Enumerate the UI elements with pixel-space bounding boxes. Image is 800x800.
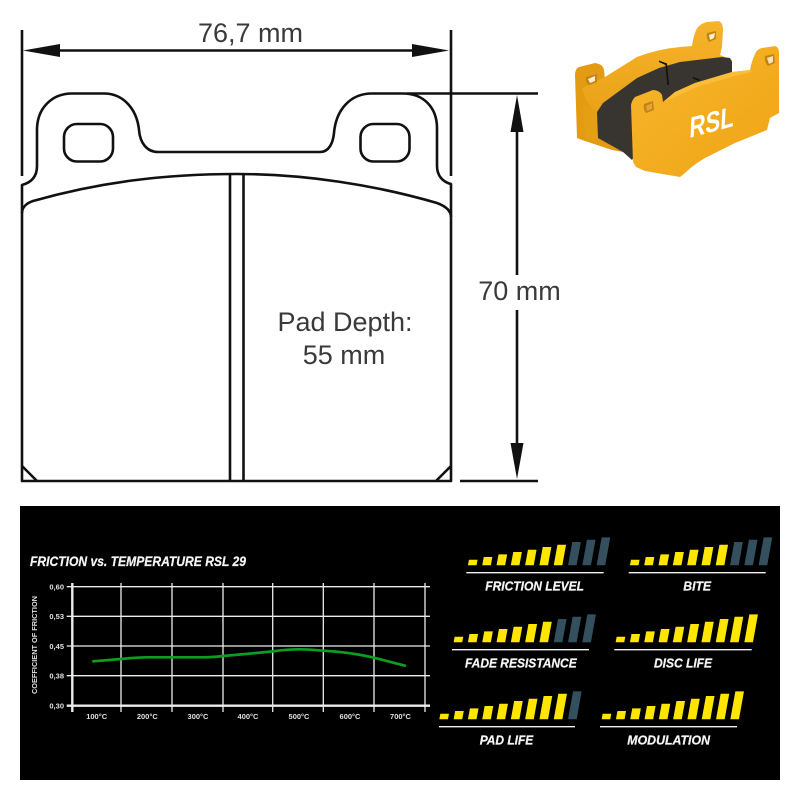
product photo: yellow RSL brake pad [575,21,779,177]
chart title: FRICTION vs. TEMPERATURE RSL 29 [30,554,246,569]
pad depth label: Pad Depth: [277,307,413,337]
line chart: friction vs temperature: 200°C [137,712,158,721]
height dimension: 70 mm: 70 mm [478,276,561,306]
logo: RSL: RSL [689,101,735,145]
technical drawing: brake pad outline [22,94,451,481]
line chart: friction vs temperature: 0,45 [49,642,64,651]
line chart: friction vs temperature: 300°C [188,712,209,721]
height dimension: 70 mm [407,94,561,481]
rating: bite: BITE [683,579,711,594]
line chart: friction vs temperature: 700°C [390,712,412,721]
line chart: friction vs temperature: 400°C [238,712,259,721]
rating: friction level: FRICTION LEVEL [485,579,584,594]
line chart: friction vs temperature: 0,38 [49,672,64,680]
rating: bite [629,538,772,594]
rating: modulation: MODULATION [627,732,711,747]
rating: disc life: DISC LIFE [654,656,712,671]
line chart: friction vs temperature: 500°C [289,712,310,721]
panel: performance data [20,506,780,780]
rating: friction level [466,538,610,594]
rating: pad life: PAD LIFE [480,732,534,747]
width dimension: 76,7 mm [22,18,451,176]
width dimension: 76,7 mm: 76,7 mm [198,18,303,48]
line chart: friction vs temperature: COEFFICIENT OF FRICTION [30,596,39,694]
pad depth label: 55 mm [303,340,385,370]
rating: pad life [439,692,581,747]
line chart: friction vs temperature: 600°C [340,712,361,721]
rating: disc life [614,615,758,671]
rating: fade resistance: FADE RESISTANCE [465,656,577,671]
rating: fade resistance [452,615,596,671]
line chart: friction vs temperature: 100°C [86,712,108,721]
pad depth label [277,307,413,370]
line chart: friction vs temperature [30,582,430,721]
line chart: friction vs temperature: 0,30 [49,702,64,710]
rating: modulation [600,692,744,747]
line chart: friction vs temperature: 0,60 [49,582,64,592]
line chart: friction vs temperature: 0,53 [49,612,64,621]
